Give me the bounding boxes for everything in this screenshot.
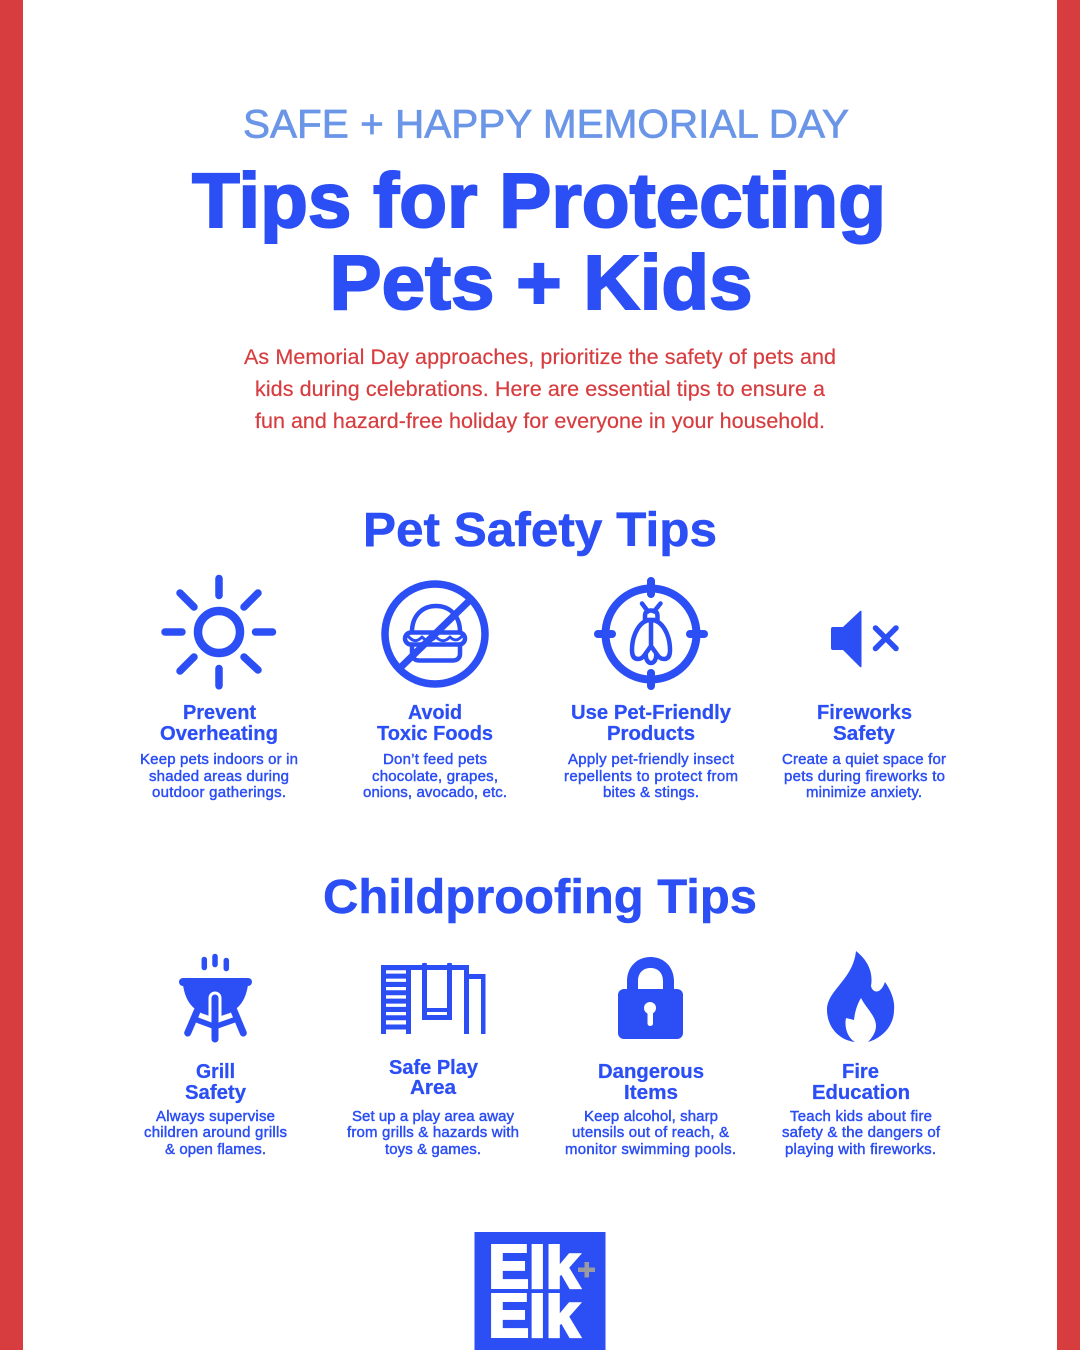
logo: Elk + Elk: Elk (488, 1282, 580, 1350)
text: safe play area (347, 1057, 519, 1158)
text: fire education: safety & the dangers of (782, 1124, 941, 1141)
intro paragraph (244, 345, 836, 433)
text: fireworks safety: pets during fireworks to (784, 768, 945, 785)
card: fireworks safety (782, 611, 946, 801)
text: fire education (782, 1061, 941, 1158)
main title: Tips for Protecting (192, 158, 886, 244)
intro paragraph: kids during celebrations. Here are essential tips to ensure a (255, 377, 825, 401)
icon: sun (165, 578, 272, 686)
text: avoid toxic foods: chocolate, grapes, (372, 768, 498, 785)
text: pet-friendly products: repellents to protect from (564, 768, 738, 785)
text: fireworks safety: Fireworks (817, 702, 912, 724)
text: prevent overheating: Prevent (183, 702, 256, 724)
text: safe play area: Safe Play (389, 1057, 479, 1079)
icon: crossed-out burger (385, 584, 485, 684)
card: prevent overheating (140, 578, 298, 801)
left red border (0, 0, 23, 1350)
text: dangerous items: utensils out of reach, & (572, 1124, 729, 1141)
text: prevent overheating: shaded areas during (149, 768, 289, 785)
text: fire education: Education (812, 1082, 910, 1104)
card: dangerous items (565, 957, 736, 1158)
text: pet-friendly products: Apply pet-friendly insect (568, 751, 735, 768)
text: grill safety: Grill (196, 1061, 235, 1083)
text: fireworks safety: minimize anxiety. (806, 784, 922, 801)
text: fire education: Teach kids about fire (790, 1108, 932, 1125)
intro paragraph: As Memorial Day approaches, prioritize the safety of pets and (244, 345, 836, 369)
text: avoid toxic foods: Toxic Foods (377, 723, 493, 745)
text: prevent overheating: Keep pets indoors or in (140, 751, 298, 768)
text: dangerous items: Keep alcohol, sharp (584, 1108, 718, 1125)
text: pet-friendly products: Use Pet-Friendly (571, 702, 732, 724)
text: fireworks safety: Create a quiet space for (782, 751, 946, 768)
text: pet-friendly products: bites & stings. (603, 784, 699, 801)
eyebrow heading: SAFE + HAPPY MEMORIAL DAY (243, 102, 849, 146)
text: prevent overheating: outdoor gatherings. (152, 784, 286, 801)
right red border (1057, 0, 1080, 1350)
text: avoid toxic foods (363, 702, 507, 801)
text: grill safety: Always supervise (156, 1108, 275, 1125)
text: prevent overheating: Overheating (160, 723, 278, 745)
section heading: childproofing: Childproofing Tips (323, 871, 757, 924)
text: avoid toxic foods: Avoid (408, 702, 462, 724)
text: avoid toxic foods: onions, avocado, etc. (363, 784, 507, 801)
card: grill safety (144, 956, 287, 1158)
text: grill safety (144, 1061, 287, 1158)
card: safe play area (347, 963, 519, 1158)
main title: Pets + Kids (330, 240, 752, 326)
text: grill safety: children around grills (144, 1124, 287, 1141)
text: dangerous items: Dangerous (598, 1061, 704, 1083)
text: safe play area: Set up a play area away (352, 1108, 514, 1125)
card: avoid toxic foods (363, 584, 507, 801)
text: grill safety: Safety (185, 1082, 247, 1104)
icon: grill (179, 956, 252, 1039)
icon: bug in crosshair (598, 581, 704, 686)
text: fire education: Fire (842, 1061, 879, 1083)
intro paragraph: fun and hazard-free holiday for everyone in your household. (255, 409, 825, 433)
text: safe play area: from grills & hazards with (347, 1124, 519, 1141)
text: avoid toxic foods: Don’t feed pets (383, 751, 487, 768)
text: fire education: playing with fireworks. (785, 1141, 936, 1158)
text: pet-friendly products (564, 702, 738, 801)
text: dangerous items (565, 1061, 736, 1158)
text: dangerous items: Items (624, 1082, 678, 1104)
text: dangerous items: monitor swimming pools. (565, 1141, 736, 1158)
text: safe play area: toys & games. (385, 1141, 481, 1158)
icon: muted speaker (831, 611, 896, 667)
logo: Elk + Elk (474, 1232, 606, 1350)
text: grill safety: & open flames. (165, 1141, 266, 1158)
text: pet-friendly products: Products (607, 723, 695, 745)
card: pet-friendly products (564, 581, 738, 801)
card: fire education (782, 951, 941, 1158)
icon: padlock (618, 957, 683, 1039)
section heading: pet safety: Pet Safety Tips (363, 504, 717, 557)
icon: playground (381, 963, 486, 1034)
text: fireworks safety (782, 702, 946, 801)
icon: flame (827, 951, 894, 1042)
text: fireworks safety: Safety (833, 723, 896, 745)
text: safe play area: Area (410, 1077, 457, 1099)
text: prevent overheating (140, 702, 298, 801)
logo: Elk + Elk: Elk (488, 1232, 580, 1302)
main title (192, 158, 886, 326)
